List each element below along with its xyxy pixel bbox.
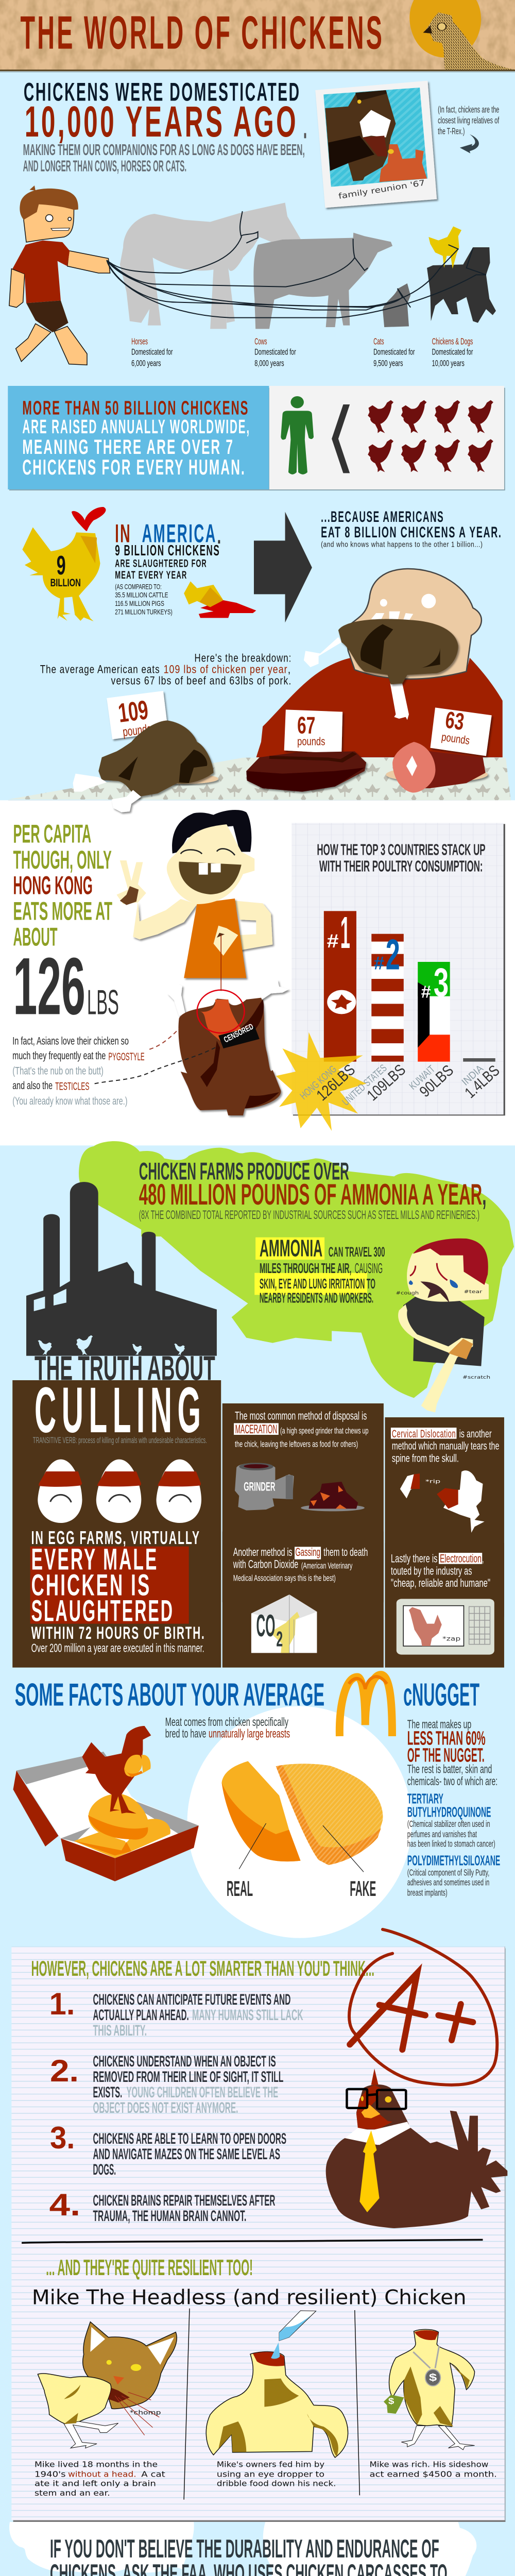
icon: eye dropper [271,2311,316,2359]
icon: engraved chicken [423,12,514,70]
illustration: man walking animals [9,185,496,365]
nugget: real [221,1761,301,1861]
item 2: 2. [50,2054,79,2088]
text: slaughter numbers: 271 MILLION TURKEYS) [115,608,173,616]
chemical: PDMS [407,1852,500,1897]
text: bred [165,1715,290,1740]
captions: panel one: without a head. [68,2470,136,2479]
animal: horse [120,202,301,329]
censored bar: CENSORED [222,1022,255,1045]
item 3: DOGS. [93,2161,116,2178]
bar: Kuwait: # [421,982,431,1002]
text: slaughter numbers: 35.5 MILLION CATTLE [115,591,168,599]
chart labels: 90LBS [417,1062,457,1100]
cloud: green gas [79,1141,514,1398]
card: 109 pounds [107,691,168,740]
animal: cow [253,233,392,329]
card: 67 pounds: 67 [297,712,315,739]
labels: domestication timeline: Domesticated for [254,347,296,357]
icon: eight chickens [368,400,493,472]
panel: electrocution [385,1543,504,1668]
white nugget backdrop [187,1706,412,1938]
food: ham [386,742,488,792]
panel: gassing: Gassing [295,1546,320,1558]
text: EVERY MALE [31,1543,158,1576]
icon: medal: $ [429,2372,437,2383]
text: In fact, Asians love their chicken so [12,1035,129,1047]
captions: panel one: 1940's [35,2470,66,2479]
text: pygostyle and testicles: (That's the nub on the butt) [12,1065,104,1077]
captions: panel one: stem and an ear. [35,2489,110,2498]
caption: family reunion '67 [338,178,426,201]
label: chickens and dogs [432,336,473,368]
panel: cervical dislocation [385,1417,504,1617]
section: ammonia cloud [79,1141,514,1398]
icon: money [384,2395,404,2414]
chart labels: UNITED STATES [340,1062,389,1108]
sound labels: #scratch [462,1375,490,1380]
item 1: 1. [49,1987,75,2021]
text: FAKE [350,1877,376,1901]
section: America slaughter: ARE SLAUGHTERED FOR [115,557,207,570]
panel: gassing [222,1532,384,1668]
illustration: chicken rump target [95,935,289,1115]
labels: domestication timeline [8,336,505,490]
text: (You already know what those are.) [12,1095,127,1107]
item 1: THIS ABILITY. [93,2022,147,2039]
icon: three eggs [38,1460,201,1523]
card: 67 pounds [284,709,342,754]
food: roast chicken [73,720,218,797]
subheading [23,141,305,175]
section: domestication intro [23,78,500,208]
highlight: every male chicken [30,1543,189,1628]
heading: in America: IN [115,519,131,548]
animal: chicken [428,226,461,269]
table with meats [7,706,511,802]
text: PYGOSTYLE [108,1050,145,1063]
bar: India [463,1058,495,1062]
text: them to death [323,1546,368,1558]
card: 109 pounds: 109 [116,695,150,728]
icon: glasses [347,2089,406,2109]
text: pygostyle and testicles: TESTICLES [55,1080,89,1092]
text: breakdown [40,652,291,687]
heading: ammonia stat [139,1158,487,1222]
stat: 9 billion: 9 [57,550,66,580]
section: Hong Kong per capita: EATS MORE AT [13,897,112,926]
icon: headless chicken: BILLION [50,577,81,589]
label: Hong Kong: HONG KONG [298,1063,339,1102]
panel: maceration: GRINDER [244,1480,275,1494]
divider [22,2240,483,2243]
panel: culling [12,1374,221,1668]
text: much they frequently eat the [12,1049,106,1062]
section: America slaughter: 9 BILLION CHICKENS [115,542,220,559]
section: Hong Kong per capita [13,790,272,1031]
chart labels: 109LBS [364,1061,409,1104]
text: breakdown: , [288,664,290,676]
section: America slaughter: Here's the breakdown: [195,652,291,665]
sound labels [396,1290,490,1380]
card: 63 pounds: pounds [441,731,471,747]
dashed pointers [149,1029,179,1049]
note: T-rex relatives [438,105,500,137]
nugget: fake [276,1764,383,1865]
bar: Hong Kong: # [327,930,339,952]
right column text [407,1727,500,1897]
person: big eater [256,569,503,757]
highlight: electrocution [439,1553,482,1565]
text: per capita: ABOUT [13,923,58,952]
captions: panel three [369,2460,497,2479]
text: CHICKEN IS [31,1568,151,1602]
card: 67 pounds: pounds [297,736,325,748]
highlight: gassing [295,1546,321,1560]
labels: domestication timeline: Domesticated for [373,347,415,357]
text: egg farm statement [30,1527,205,1655]
illustration: real vs fake nugget [221,1761,383,1901]
table [7,758,511,802]
censored bar [218,1022,260,1048]
bar: United States: # [374,954,384,974]
captions: panel one: Mike lived 18 months in the [35,2460,158,2469]
text: ammonia travel [254,1234,385,1306]
item 1 [49,1987,303,2039]
panel: maceration [222,1403,384,1602]
highlight: maceration [234,1422,279,1436]
panel: gassing: (American Veterinary [301,1561,352,1571]
text: ammonia travel: AMMONIA [260,1234,322,1261]
stat: 9 billion [50,550,81,589]
item 2: EXISTS. [93,2084,122,2101]
header banner [0,0,515,73]
chart title [317,841,486,875]
icon: microwave [397,1599,494,1655]
card: 63 pounds: 63 [444,706,466,735]
section: smarter than you think [31,1929,497,2085]
captions: panel two: using an eye dropper to [217,2470,324,2479]
icon: less-than sign [332,404,350,473]
section: Hong Kong per capita: HONG KONG [13,871,93,900]
handwritten grade A+ [349,1929,497,2085]
sound labels: #cough [396,1291,419,1296]
icon: microwave: *zap [442,1636,460,1642]
text: bred: bred to have [165,1726,207,1740]
text: slaughter numbers: 116.5 MILLION PIGS [115,600,164,607]
section: Hong Kong per capita: THOUGH, ONLY [13,845,112,874]
item 4: 4. [49,2188,80,2222]
animal: cat [383,283,410,327]
icon: headless chicken [22,507,106,621]
heading: in America [115,519,220,548]
panel: 50 billion chickens [8,386,505,490]
arrow: big right arrow [254,512,312,622]
card: 109 pounds: pounds [122,722,152,739]
comma [304,133,306,138]
bone overlapping white [112,790,141,812]
captions: panel one: A cat [141,2470,165,2479]
text: breakdown: The average American eats [40,664,160,676]
icon: chicken on nugget box [13,1726,199,1882]
panel: maceration: MACERATION [235,1422,277,1436]
panel: gassing: with Carbon Dioxide [233,1558,298,1571]
label: horses: Horses [131,336,148,347]
comic: eye dropper feeding [206,2311,348,2458]
captions: panel one [35,2460,165,2498]
person: boy [9,185,110,365]
food: steak [246,751,366,792]
stat: 126 lbs [13,941,119,1031]
captions: panel two: dribble food down his neck. [217,2480,336,2488]
arrow: curved to photo [460,134,479,154]
text: unnaturally large breasts [209,1726,290,1740]
comic dividers [184,2309,359,2500]
item 3: 3. [50,2121,75,2155]
section: FAA test [9,2522,476,2576]
sound: chomp: *chomp [130,2410,161,2416]
icon: severed head [184,581,256,618]
text: statistic [22,397,250,479]
text: pygostyle and testicles [12,1035,145,1107]
chart labels: 1.4LBS [462,1062,503,1101]
chart labels: KUWAIT [407,1063,437,1092]
chart: top countries poultry consumption: 3 [434,960,449,1005]
highlight: cervical dislocation [391,1428,456,1440]
item 1: ACTUALLY PLAN AHEAD. [93,2007,189,2024]
labels: domestication timeline: 6,000 years [131,359,161,368]
list: chicken smarts [49,1987,303,2225]
captions: panel two: Mike's owners fed him by [217,2460,324,2469]
text: FAA test [50,2534,455,2576]
section: Hong Kong per capita: 126 [13,941,85,1031]
photo: family reunion polaroid [315,81,437,208]
label: cows: Cows [254,336,267,347]
bar: United States [371,930,404,1062]
item 2 [50,2053,283,2116]
text: CAUSING [355,1260,383,1277]
icon: professor chicken [326,2069,507,2228]
icon: medal [413,2346,440,2386]
icon: starburst highlight [276,1032,366,1131]
captions: panel one: ate it and left only a brain [35,2480,156,2488]
item 4 [49,2188,275,2225]
icon: sun behind chicken [409,0,481,58]
item 3 [50,2121,286,2178]
comic: rich Mike [384,2329,475,2450]
clouds: behind text [9,2522,476,2576]
animal: dog [427,247,496,323]
icon: CO2 chamber: CO [256,1608,275,1643]
panel: notebook paper [11,1946,506,2522]
chart: top countries poultry consumption: 1 [340,907,350,958]
icon: money: $ [388,2397,394,2406]
icon: small hens [38,1335,185,1355]
text: pygostyle and testicles: and also the [12,1079,53,1092]
text: slaughter numbers [115,542,220,616]
section: America slaughter: MEAT EVERY YEAR [115,569,187,581]
text: SLAUGHTERED [31,1594,174,1628]
captions: panel two [217,2460,336,2488]
chart: top countries poultry consumption: 2 [386,930,400,978]
text: because Americans [321,508,502,549]
illustration: real vs fake nugget: REAL [227,1877,253,1901]
chart labels: 126LBS [314,1061,358,1104]
sound labels: #tear [464,1290,483,1295]
icon: human figure [281,396,314,474]
section: America slaughter: 109 lbs of chicken per year [164,664,288,676]
section: Hong Kong per capita: LBS [87,982,119,1022]
chart labels [298,1061,503,1108]
labels: domestication timeline: 8,000 years [254,359,284,368]
labels: domestication timeline: 9,500 years [373,359,403,368]
person: coughing worker [396,1239,490,1413]
icon: torn chicken: *rip [425,1478,440,1484]
section: America slaughter [22,507,503,757]
panel: gassing: Another method is [233,1546,293,1558]
icon: factory silhouette [26,1182,217,1387]
section: America slaughter: AMERICA [142,519,217,548]
icon: CO2 chamber: 2 [276,1627,283,1651]
labels: domestication timeline: Domesticated for [131,347,173,357]
bar: Kuwait [418,960,450,1062]
card: 63 pounds [430,706,492,756]
icon: golden arches [339,1675,392,1736]
text: per capita [13,820,112,952]
label: cats [373,336,415,368]
section: ammonia cloud: , [482,1178,487,1211]
icon: grinder [235,1463,294,1511]
leashes [107,211,486,318]
label: cows [254,336,296,368]
label: horses [131,336,173,368]
label: cats: Cats [373,336,384,347]
chemical: TBHQ [407,1790,495,1849]
panel: electrocution: , [482,1553,484,1565]
icon: ground meat [301,1482,365,1511]
bar: Hong Kong [324,907,356,1062]
section: white per capita [0,800,515,1145]
icon: CO2 chamber [251,1595,317,1653]
person: peace sign man [116,810,272,978]
chart: top countries poultry consumption [291,823,505,1115]
stat: less than 60% [407,1727,486,1766]
chart labels: INDIA [460,1063,486,1088]
icon: torn chicken [400,1470,485,1533]
section: Hong Kong per capita: PER CAPITA [13,820,91,849]
comic: cat chomps [38,2322,177,2448]
text: slaughter numbers: (AS COMPARED TO: [115,583,162,591]
target circle [197,990,244,1033]
